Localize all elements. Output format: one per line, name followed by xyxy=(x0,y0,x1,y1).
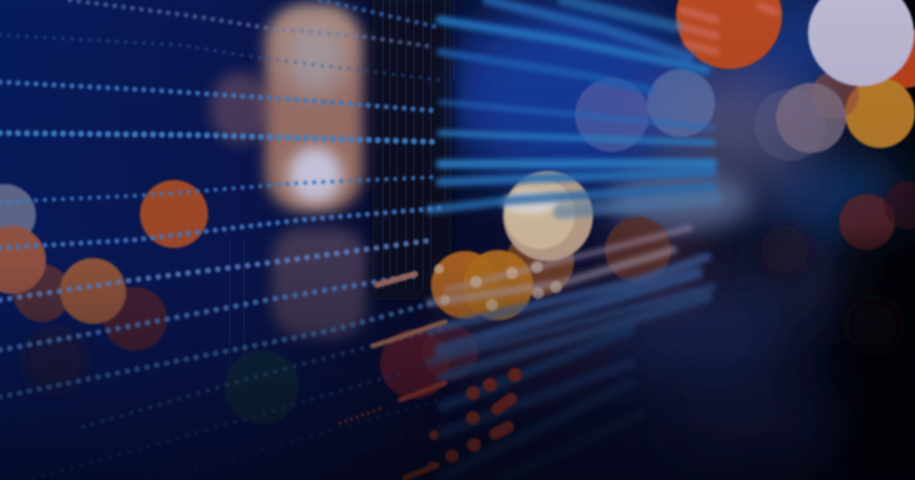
bokeh circles: center warm cluster xyxy=(380,171,671,399)
blurred streak lines: lower right xyxy=(430,228,712,480)
dotted data lines: left upper xyxy=(0,0,440,248)
blue glow behind streaks xyxy=(440,0,910,465)
pink bands on red circle xyxy=(680,6,776,52)
vertical grid texture xyxy=(230,0,454,400)
dark panel behind center grid xyxy=(372,0,452,300)
red dots and pills xyxy=(428,368,522,470)
orange line accents xyxy=(340,274,445,478)
bokeh circles: top right xyxy=(575,0,915,355)
dotted data lines: left lower xyxy=(0,240,450,478)
bokeh circles: left cluster xyxy=(0,180,299,424)
blurred streak lines: upper right xyxy=(430,0,715,212)
blurred light pillar xyxy=(210,4,366,338)
white dot highlights on warm cluster xyxy=(434,261,562,311)
grey blue haze xyxy=(608,168,752,232)
